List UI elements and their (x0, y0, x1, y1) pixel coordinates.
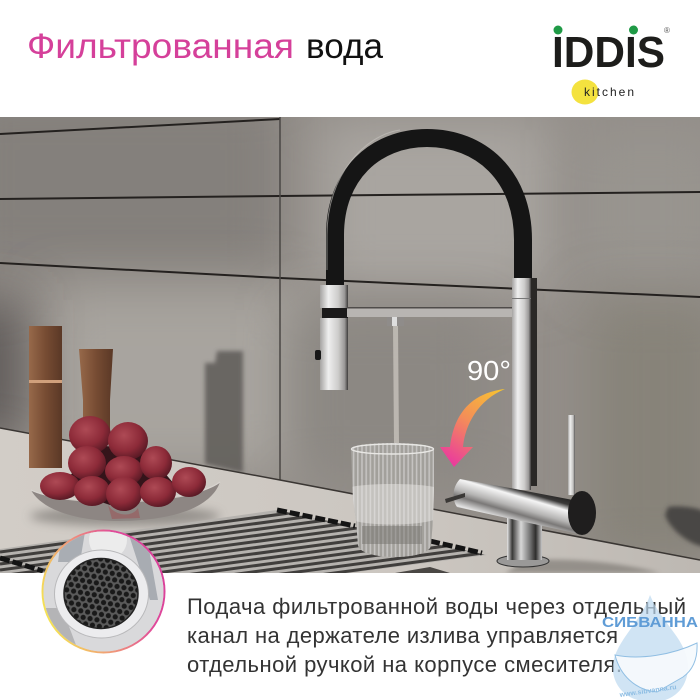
logo: iddis kitchen (552, 26, 670, 104)
description text: Подача фильтрованной воды через отдельный (187, 594, 686, 619)
rack (0, 510, 486, 573)
water stream (393, 326, 399, 444)
main column (531, 278, 537, 486)
sink opening (395, 567, 450, 573)
title: Фильтрованная (27, 27, 294, 66)
bowl of plums (31, 416, 220, 521)
wall panel joints (0, 117, 700, 480)
side lever (568, 415, 575, 495)
wall (0, 90, 700, 577)
watermark tub (615, 643, 697, 692)
outlet (387, 317, 404, 326)
horizontal spout (347, 308, 512, 317)
faucet (315, 130, 596, 567)
rack end caps (0, 510, 482, 571)
logo yellow spot (572, 80, 598, 104)
end cap (568, 491, 596, 535)
counter top (0, 428, 700, 573)
wall shadow of pepper mill (205, 351, 243, 473)
logo: iddis kitchen: kitchen (584, 85, 634, 99)
logo: iddis kitchen: IDDIS (552, 28, 665, 77)
stem and base (497, 555, 549, 567)
hose (335, 138, 523, 286)
photo: kitchen scene (0, 117, 700, 573)
watermark drop (613, 595, 688, 700)
round inset: aerator (42, 521, 166, 654)
description text: канал на держателе излива управляется (187, 623, 618, 648)
label 90 degrees: 90° (467, 355, 511, 386)
title: вода (306, 27, 384, 66)
watermark text: СИБВАННА (602, 615, 699, 631)
logo: iddis kitchen: ® (664, 26, 670, 35)
description text (187, 594, 686, 677)
watermark url: www.sibvanna.ru (618, 684, 677, 699)
wall shadow at right (665, 506, 700, 547)
arrow 90 degrees (440, 389, 505, 467)
description text: отдельной ручкой на корпусе смесителя. (187, 652, 622, 677)
glass of water (350, 443, 434, 557)
aerator mesh (64, 558, 138, 628)
wall lighting (0, 117, 278, 267)
body (454, 479, 582, 535)
pull-out spray head (320, 285, 348, 308)
watermark: sibvanna (602, 595, 699, 700)
counter shadows (505, 560, 660, 573)
pepper mills (29, 326, 113, 468)
